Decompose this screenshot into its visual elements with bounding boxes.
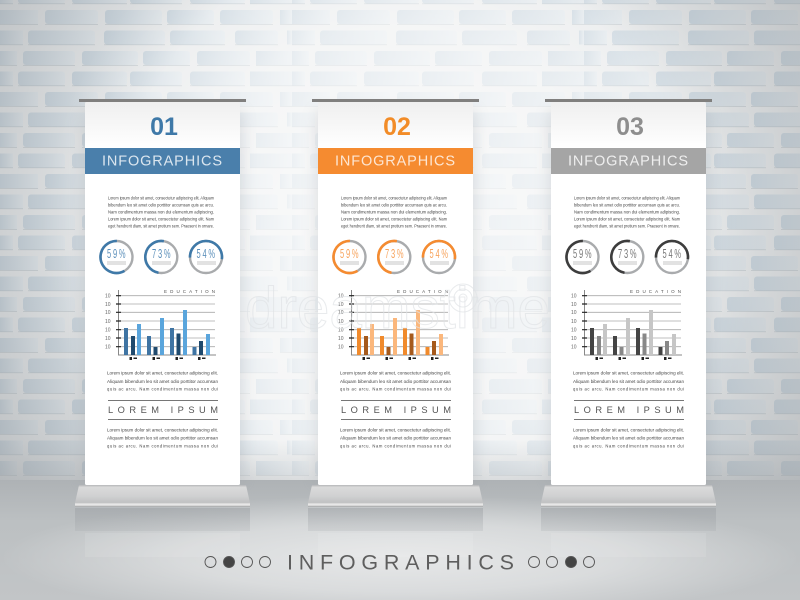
banner 2 intro text: Lorem ipsum dolor sit amet, consectetur adipiscing elit. Nam <box>341 216 447 222</box>
banner 1 subheading <box>108 400 218 420</box>
banner 2 ring 59% <box>328 235 371 279</box>
banner 1 body text: quis ac arcu. Nam condimentum massa non dui <box>107 386 218 392</box>
banner 3 bar chart: 10 <box>571 336 577 342</box>
banner 3 stand base <box>541 485 716 507</box>
banner 2 intro text: Nam condimentum massa non dui elementum adipiscing. <box>341 210 447 214</box>
banner 1 top rail <box>79 99 246 102</box>
banner 1 footer text <box>107 428 219 448</box>
banner 3 footer text: quis ac arcu. Nam condimentum massa non dui <box>573 444 684 448</box>
banner 3 bar chart: 10 <box>571 310 577 316</box>
banner 1 bar chart: 10 <box>105 319 111 325</box>
banner 1 subheading: LOREM IPSUM <box>108 405 218 415</box>
banner 3 ring 59% <box>561 235 604 279</box>
banner 3 body text: Aliquam bibendum leo sit amet odio porttitor accumsan <box>573 379 685 384</box>
banner 1 bar chart: 10 <box>105 344 111 350</box>
banner 3 number: 03 <box>616 113 644 141</box>
banner 3 body text: quis ac arcu. Nam condimentum massa non dui <box>573 386 684 392</box>
banner 3 wall shadow <box>548 110 709 482</box>
banner 2 body text <box>340 370 452 392</box>
banner 2: orange <box>308 99 483 557</box>
banner 3 bar chart <box>571 289 682 360</box>
banner 3 bar chart: 10 <box>571 319 577 325</box>
banner 1 header band <box>85 148 240 174</box>
right dot indicator <box>528 556 594 568</box>
banner 1 bar chart: EDUCATION <box>164 289 215 294</box>
banner 3 ring 54%: 54% <box>662 248 683 262</box>
banner 3 ring 73% <box>609 238 646 276</box>
banner 2 subheading: LOREM IPSUM <box>341 405 451 415</box>
banner 3 top rail <box>545 99 712 102</box>
banner 2 bar chart: 10 <box>338 294 344 300</box>
banner 2 footer text <box>340 428 452 448</box>
banner 1 floor reflection <box>75 508 250 557</box>
banner 1 wall shadow <box>82 110 243 482</box>
banner 1 bar chart: 10 <box>105 302 111 308</box>
banner 3 ring 59%: 59% <box>573 248 593 262</box>
banner 2 ring 73% <box>376 238 413 276</box>
banner 3 bar chart: 10 <box>571 344 577 350</box>
banner 1 ring 73% <box>143 238 180 276</box>
banner 2 bar chart: 10 <box>338 319 344 325</box>
banner 1 bar chart: 10 <box>105 294 111 300</box>
banner 1 ring 73%: 73% <box>152 248 172 262</box>
left dot indicator <box>205 556 270 568</box>
banner 3 ring 73%: 73% <box>618 248 638 262</box>
banner 2 bar chart: 10 <box>338 344 344 350</box>
banner 2 ring 54% <box>422 240 456 274</box>
banner 2 footer text: Aliquam bibendum leo sit amet odio porttitor accumsan <box>340 436 452 440</box>
banner 1 intro text: Lorem ipsum dolor sit amet, consectetur adipiscing elit. Nam <box>108 216 214 222</box>
banner 3 bar chart: 10 <box>571 302 577 308</box>
footer title: INFOGRAPHICS <box>287 550 514 574</box>
banner 1 ring 54%: 54% <box>196 248 217 262</box>
banner 3 header band: INFOGRAPHICS <box>568 154 688 170</box>
banner 1 ring 54% <box>189 240 223 274</box>
banner 1 footer text: quis ac arcu. Nam condimentum massa non dui <box>107 444 218 448</box>
banner 2 header band: INFOGRAPHICS <box>335 154 455 170</box>
banner 2 ring 73%: 73% <box>385 248 405 262</box>
footer title with dot indicators <box>205 550 594 574</box>
banner 3 subheading: LOREM IPSUM <box>574 405 684 415</box>
banner 3 sheet <box>551 102 706 485</box>
banner 2 subheading <box>341 400 451 420</box>
banner 3 body text <box>573 370 685 392</box>
banner 2 stand base <box>308 485 483 507</box>
banner 1 intro text: eget hendrerit diam, sit amet pretium sem. Praesent in ornare. <box>108 224 214 228</box>
banner 1 number: 01 <box>150 113 178 141</box>
banner 1 bar chart: 10 <box>105 310 111 316</box>
banner 3 body text: Lorem ipsum dolor sit amet, consectetur adipiscing elit. <box>573 370 684 376</box>
banner 1 intro text: Nam condimentum massa non dui elementum adipiscing. <box>108 210 214 214</box>
banner 1 sheet <box>85 102 240 485</box>
banner 1 header band: INFOGRAPHICS <box>102 154 222 170</box>
banner 3 intro text: Lorem ipsum dolor sit amet, consectetur adipiscing elit. Aliquam <box>574 196 680 200</box>
banner 2 bar chart: 10 <box>338 336 344 342</box>
banner 1 footer text: Lorem ipsum dolor sit amet, consectetur adipiscing elit. <box>107 428 218 432</box>
banner 3: gray <box>541 99 716 557</box>
watermark: dreamstime <box>245 276 550 341</box>
banner 2 body text: quis ac arcu. Nam condimentum massa non dui <box>340 386 451 392</box>
banner 2 bar chart: 10 <box>338 310 344 316</box>
banner 2 intro text: bibendum leo sit amet odio porttitor accumsan quis ac arcu. <box>341 202 447 208</box>
banner 3 bar chart: 10 <box>571 294 577 300</box>
banner 2 header band <box>318 148 473 174</box>
banner 2 floor reflection <box>308 508 483 557</box>
banner 1 stand base <box>75 485 250 507</box>
banner 3 intro text: Lorem ipsum dolor sit amet, consectetur adipiscing elit. Nam <box>574 216 680 222</box>
banner 2 intro text: Lorem ipsum dolor sit amet, consectetur adipiscing elit. Aliquam <box>341 196 447 200</box>
banner 3 intro text <box>574 196 680 228</box>
banner 3 subheading <box>574 400 684 420</box>
banner 1 body text <box>107 370 219 392</box>
banner 1 intro text <box>108 196 214 228</box>
banner 3 intro text: Nam condimentum massa non dui elementum adipiscing. <box>574 210 680 214</box>
banner 3 header band <box>551 148 706 174</box>
banner 3 intro text: eget hendrerit diam, sit amet pretium sem. Praesent in ornare. <box>574 224 680 228</box>
banner 2 footer text: quis ac arcu. Nam condimentum massa non dui <box>340 444 451 448</box>
floor <box>0 480 800 600</box>
banner 2 wall shadow <box>315 110 476 482</box>
banner 3 bar chart: EDUCATION <box>630 289 681 294</box>
banner 2 bar chart: 10 <box>338 302 344 308</box>
banner 2 body text: Aliquam bibendum leo sit amet odio porttitor accumsan <box>340 379 452 384</box>
banner 1: blue <box>75 99 250 557</box>
banner 1 body text: Lorem ipsum dolor sit amet, consectetur adipiscing elit. <box>107 370 218 376</box>
banner 2 intro text: eget hendrerit diam, sit amet pretium sem. Praesent in ornare. <box>341 224 447 228</box>
banner 1 bar chart: 10 <box>105 328 111 334</box>
banner 1 bar chart <box>105 289 216 360</box>
banner 1 body text: Aliquam bibendum leo sit amet odio porttitor accumsan <box>107 379 219 384</box>
banner 1 bar chart: 10 <box>105 336 111 342</box>
banner 1 footer text: Aliquam bibendum leo sit amet odio porttitor accumsan <box>107 436 219 440</box>
banner 2 ring 59%: 59% <box>340 248 360 262</box>
banner 2 body text: Lorem ipsum dolor sit amet, consectetur adipiscing elit. <box>340 370 451 376</box>
banner 2 ring 54%: 54% <box>430 248 450 262</box>
banner 2 footer text: Lorem ipsum dolor sit amet, consectetur adipiscing elit. <box>340 428 451 432</box>
banner 2 bar chart <box>338 289 449 360</box>
banner 3 bar chart: 10 <box>571 328 577 334</box>
banner 1 intro text: Lorem ipsum dolor sit amet, consectetur adipiscing elit. Aliquam <box>108 196 214 200</box>
banner 1 ring 59%: 59% <box>107 248 127 262</box>
banner 2 bar chart: 10 <box>338 328 344 334</box>
banner 3 footer text: Lorem ipsum dolor sit amet, consectetur adipiscing elit. <box>573 428 684 432</box>
banner 3 intro text: bibendum leo sit amet odio porttitor accumsan quis ac arcu. <box>574 202 680 208</box>
banner 3 floor reflection <box>541 508 716 557</box>
banner 2 sheet <box>318 102 473 485</box>
banner 2 intro text <box>341 196 447 228</box>
banner 1 intro text: bibendum leo sit amet odio porttitor accumsan quis ac arcu. <box>108 202 214 208</box>
banner 2 top rail <box>312 99 479 102</box>
banner 3 ring 54% <box>655 240 689 274</box>
banner 3 footer text: Aliquam bibendum leo sit amet odio porttitor accumsan <box>573 436 685 440</box>
banner 3 footer text <box>573 428 685 448</box>
banner 1 ring 59% <box>95 235 138 279</box>
banner 2 bar chart: EDUCATION <box>397 289 448 294</box>
banner 2 number: 02 <box>383 113 411 141</box>
